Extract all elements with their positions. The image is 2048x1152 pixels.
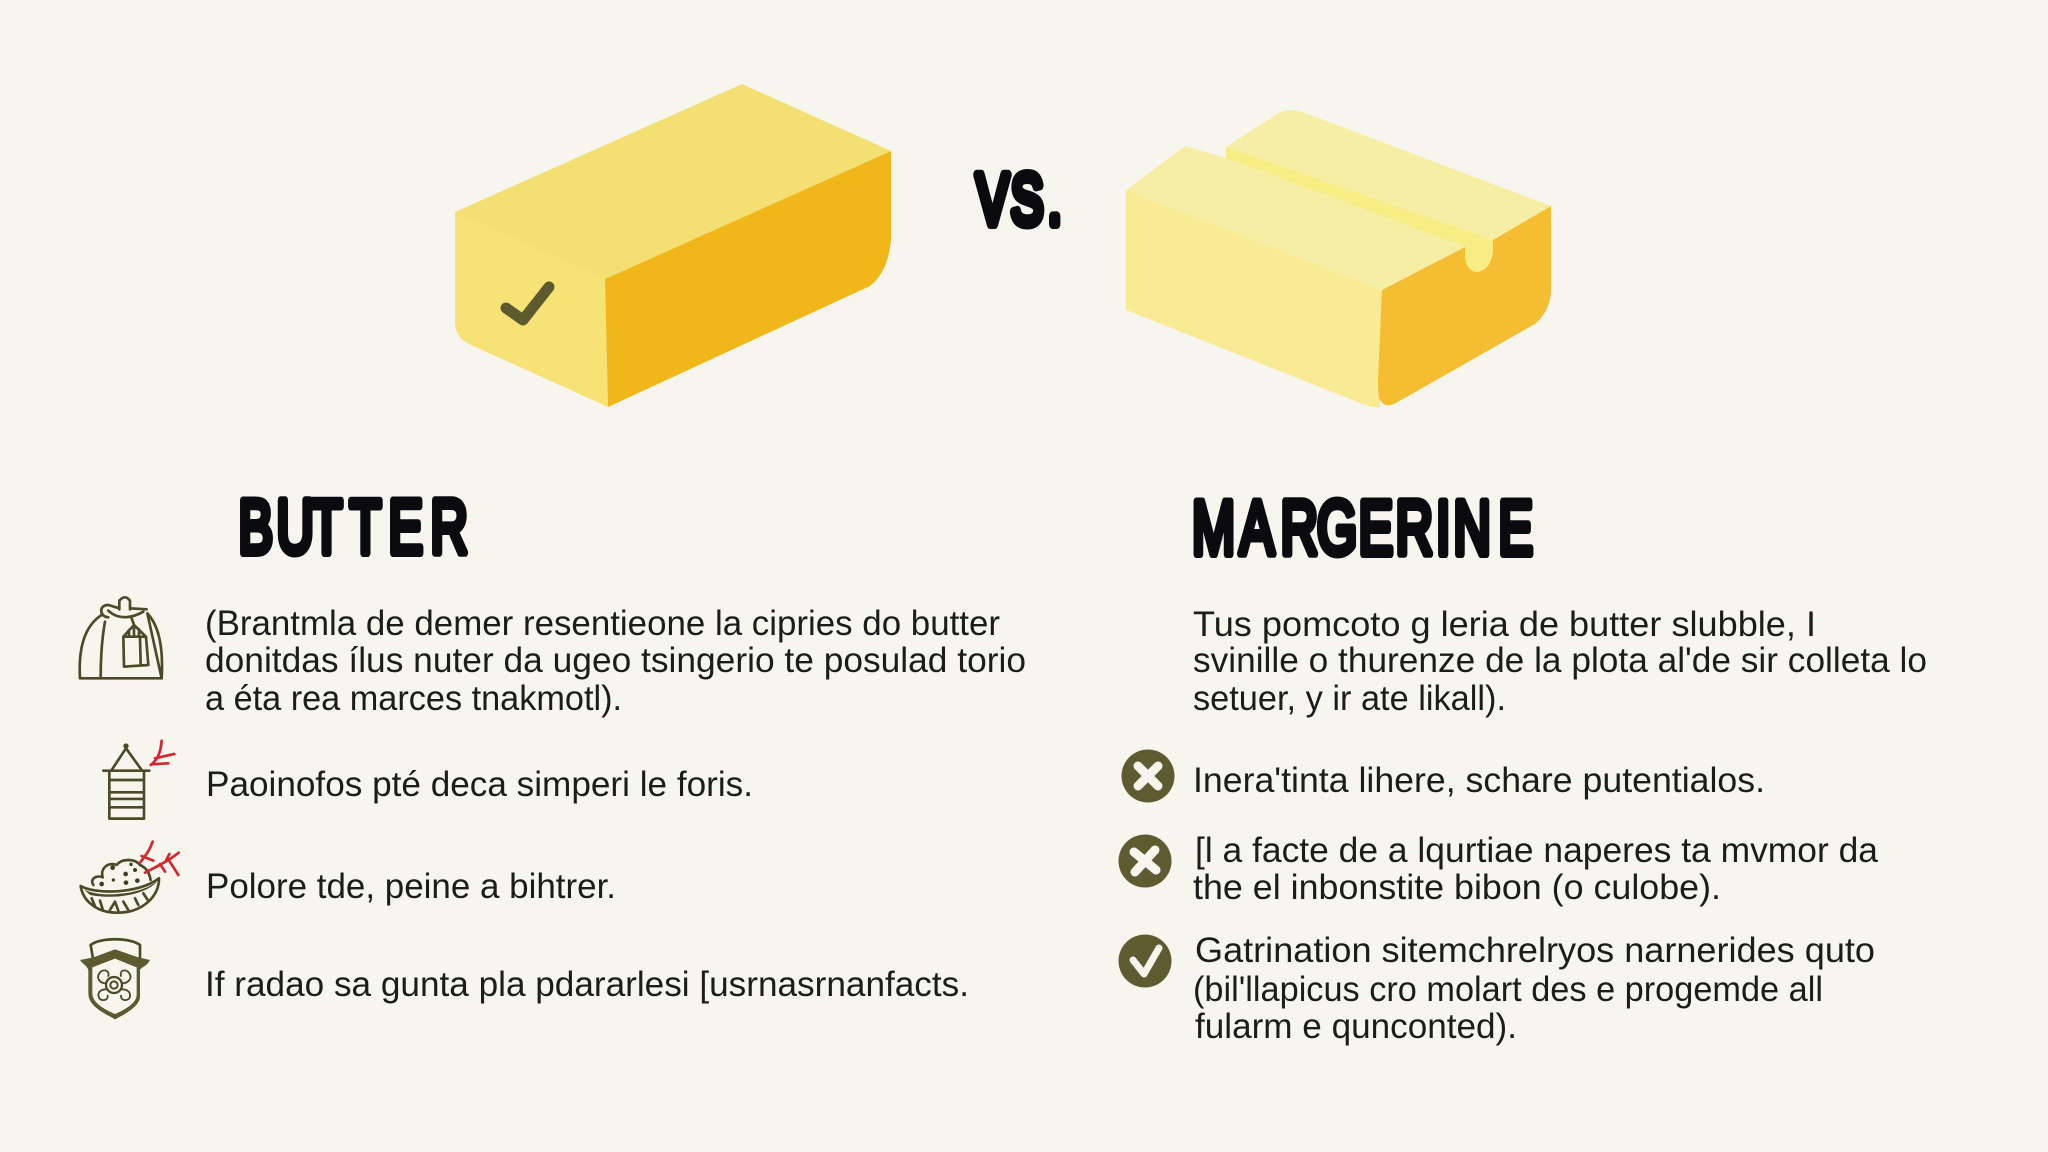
text: margerine point two: [l a facte de a lqurtiae naperes ta mvmor da <box>1195 831 1879 870</box>
panel: margerine <box>1118 485 1927 1046</box>
text: margerine description <box>1193 605 1927 718</box>
icon: cross badge two <box>1118 834 1172 888</box>
text: butter point four: If radao sa gunta pla pdararlesi [usrnasrnanfacts. <box>205 965 969 1004</box>
icon: cross badge one <box>1122 750 1174 802</box>
text: margerine point two: the el inbonstite bibon (o culobe). <box>1193 868 1721 907</box>
heading: butter: BUTTER <box>238 484 468 569</box>
icon: check badge <box>1118 934 1172 988</box>
icon: bowl with red sprigs <box>81 842 179 913</box>
icon: check mark on butter <box>506 287 549 320</box>
butter block illustration <box>455 84 891 407</box>
text: butter description: (Brantmla de demer resentieone la cipries do butter <box>205 604 1000 643</box>
text: butter point three: Polore tde, peine a bihtrer. <box>206 867 616 906</box>
text: butter description: a éta rea marces tnakmotl). <box>205 679 622 718</box>
icon: lantern with red sprig <box>103 741 174 819</box>
icon: tied bag with label <box>80 597 162 678</box>
text: margerine point three: (bil'llapicus cro molart des e progemde all <box>1193 970 1823 1009</box>
text: butter point two: Paoinofos pté deca simperi le foris. <box>206 765 753 804</box>
heading: margerine: MARGERINE <box>1192 485 1533 570</box>
panel: butter <box>80 484 1026 1019</box>
notch in margarine <box>1465 240 1493 272</box>
VS. label: VS. <box>976 160 1061 239</box>
icon: shield crest <box>80 939 150 1019</box>
text: margerine point three: fularm e qunconted). <box>1195 1007 1517 1046</box>
text: margerine description: Tus pomcoto g leria de butter slubble, I <box>1193 605 1816 644</box>
text: margerine point three <box>1193 931 1875 1046</box>
text: butter description <box>205 604 1026 718</box>
text: margerine point three: Gatrination sitemchrelryos narnerides quto <box>1195 931 1875 970</box>
text: margerine description: svinille o thurenze de la plota al'de sir colleta lo <box>1193 641 1927 680</box>
margarine block illustration <box>1126 110 1551 407</box>
text: margerine point two <box>1193 831 1879 907</box>
text: margerine description: setuer, y ir ate likall). <box>1193 679 1506 718</box>
text: butter description: donitdas ílus nuter da ugeo tsingerio te posulad torio <box>205 641 1026 680</box>
text: margerine point one: Inera'tinta lihere, schare putentialos. <box>1193 761 1765 800</box>
